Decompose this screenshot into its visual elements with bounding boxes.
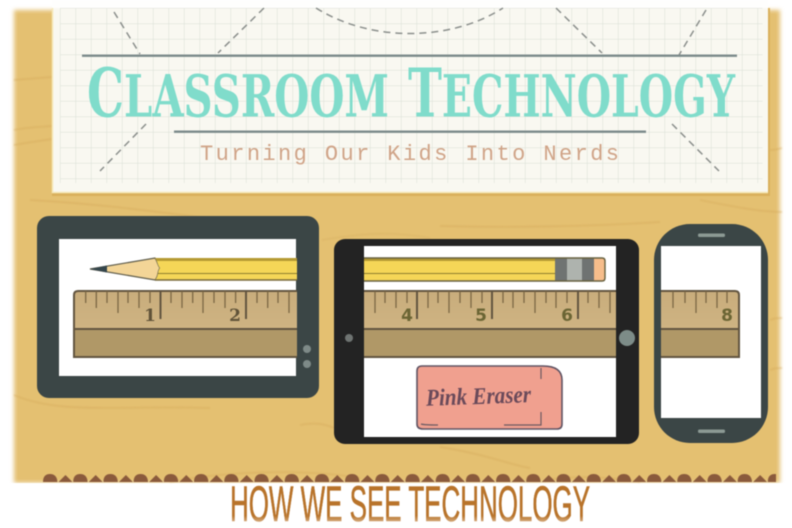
pencil body left: [155, 258, 297, 280]
pencil body right: [364, 258, 605, 281]
home bar: [698, 430, 725, 433]
home button: [619, 330, 635, 346]
scalloped trim: [43, 474, 776, 482]
title rule top: [82, 54, 737, 57]
dashed construction lines: [100, 8, 719, 171]
wood grain: [14, 77, 782, 482]
ruler middle: 5: [475, 306, 487, 326]
ruler right: 8: [721, 306, 733, 326]
subtitle: Turning Our Kids Into Nerds: [200, 142, 619, 167]
device: smartphone: [654, 224, 768, 443]
pencil tip: [90, 258, 160, 280]
ruler left: 2: [229, 306, 241, 326]
title rule bottom: [174, 130, 646, 133]
tablet buttons: [303, 345, 311, 368]
pink eraser: Pink Eraser: [425, 382, 532, 412]
device: landscape tablet: [37, 216, 319, 398]
panel: graph paper title card: [52, 0, 770, 196]
title: [87, 54, 735, 132]
ruler middle: 6: [561, 306, 573, 326]
ruler left: [74, 291, 297, 357]
ruler middle: 4: [401, 306, 413, 326]
ruler left: 1: [144, 306, 156, 326]
camera dot: [345, 334, 353, 342]
ruler middle: [364, 291, 616, 357]
title: CLASSROOM: [87, 54, 389, 132]
device: portrait tablet: [334, 239, 639, 444]
ruler right: [661, 291, 739, 357]
speaker: [698, 234, 725, 237]
pink eraser: [417, 366, 562, 429]
